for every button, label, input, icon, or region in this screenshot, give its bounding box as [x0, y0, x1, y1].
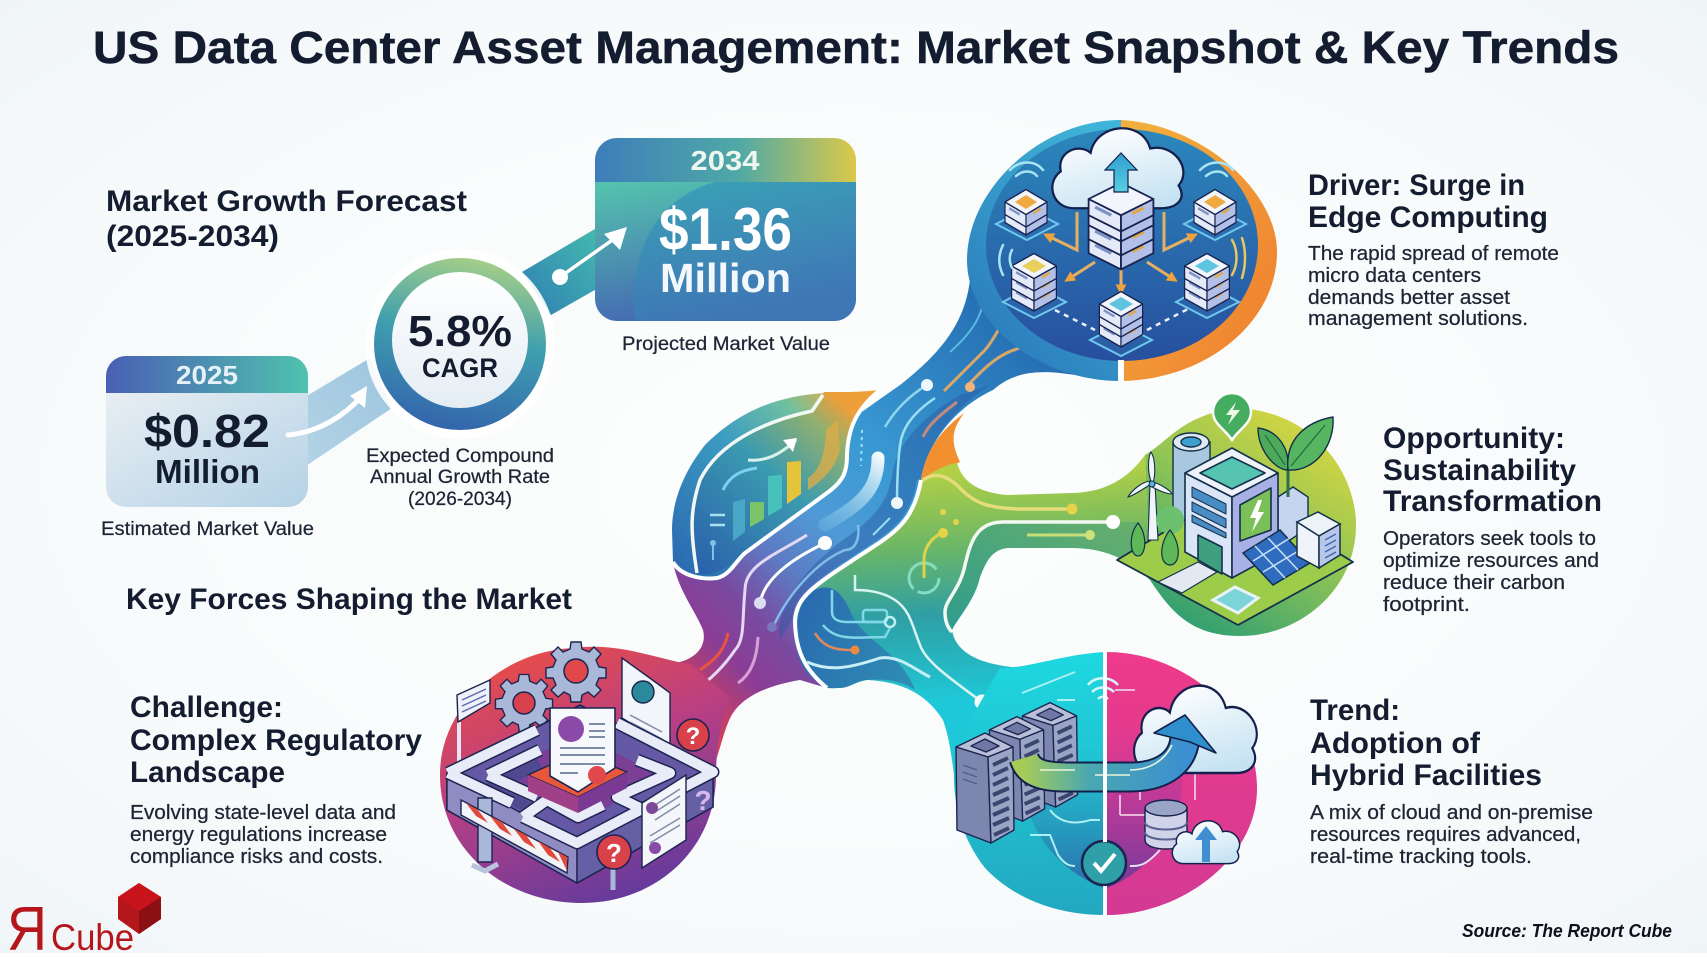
icon: site base	[1117, 490, 1353, 625]
heading: market growth forecast: (2025-2034)	[106, 220, 279, 253]
text: challenge heading: Challenge:	[130, 691, 283, 724]
icon: wifi signals	[999, 162, 1245, 278]
heading: market growth forecast: Market Growth Forecast	[106, 185, 467, 218]
card: 2034 value	[595, 138, 856, 321]
text: challenge body: energy regulations increase	[130, 824, 387, 846]
text: challenge body	[130, 802, 396, 868]
text: driver heading: Driver: Surge in	[1308, 169, 1525, 202]
icon: large gear	[546, 642, 606, 702]
icon: database	[1145, 800, 1187, 849]
text: trend body: real-time tracking tools.	[1310, 846, 1532, 868]
text: trend body	[1310, 802, 1593, 868]
card: 2025 value: Million	[155, 453, 260, 490]
card: 2025 value: $0.82	[144, 405, 270, 457]
icon: wind turbine	[1128, 452, 1172, 540]
caption: projected market value: Projected Market Value	[622, 334, 830, 355]
icon: small gear hole	[513, 692, 535, 714]
text: challenge heading: Landscape	[130, 756, 285, 789]
caption: estimated market value: Estimated Market Value	[101, 519, 314, 540]
icon: question sign bottom	[597, 835, 631, 890]
card: 2025 value: 2025	[176, 360, 238, 390]
text: trend body: resources requires advanced,	[1310, 824, 1581, 846]
text: trend body: A mix of cloud and on-premise	[1310, 802, 1593, 824]
text: challenge heading: Complex Regulatory	[130, 724, 422, 757]
panel: trend illustration	[954, 652, 1257, 916]
icon: hybrid arrow	[1024, 715, 1216, 777]
icon: question sign bottom: ?	[606, 838, 622, 868]
text: driver body	[1308, 243, 1559, 330]
caption: CAGR description: (2026-2034)	[408, 489, 512, 510]
icon: data lines	[1022, 672, 1195, 866]
icon: barrier	[461, 798, 568, 873]
icon: platforms	[996, 208, 1246, 356]
icon: maze	[447, 705, 713, 883]
text: driver body: management solutions.	[1308, 308, 1528, 330]
icon: flag	[457, 680, 490, 770]
text: driver heading	[1308, 169, 1548, 234]
CAGR ring	[365, 249, 555, 439]
flow: chart lobe	[672, 390, 880, 578]
flow: green and teal branches	[795, 455, 1150, 900]
icon: faint question mark: ?	[694, 785, 712, 816]
text: opportunity body: footprint.	[1383, 594, 1470, 616]
CAGR ring: CAGR	[422, 353, 498, 383]
icon: cloud	[1052, 128, 1183, 208]
source note: Source: The Report Cube	[1462, 921, 1672, 941]
CAGR ring: 5.8%	[408, 307, 512, 356]
flow: orange wedge	[921, 413, 964, 480]
text: challenge body: compliance risks and costs.	[130, 846, 383, 868]
text: trend heading: Hybrid Facilities	[1310, 759, 1542, 792]
bottom edge strip	[0, 953, 1707, 957]
icon: wifi	[1088, 678, 1118, 699]
card: 2034 value: Million	[660, 255, 791, 301]
flow: main river	[600, 270, 1121, 800]
title: US Data Center Asset Management: Market Snapshot & Key Trends	[93, 22, 1619, 73]
arrow band: CAGR to 2034	[522, 226, 600, 315]
text: driver body: micro data centers	[1308, 265, 1481, 287]
icon: side building	[1297, 512, 1340, 568]
icon: leaf plant	[1258, 417, 1333, 497]
icon: trees	[1131, 506, 1184, 565]
heading: market growth forecast	[106, 185, 467, 253]
text: opportunity body: reduce their carbon	[1383, 572, 1565, 594]
caption: CAGR description: Expected Compound	[366, 446, 554, 467]
icon: silo	[1173, 433, 1210, 520]
logo: RCube: Cube	[51, 917, 134, 957]
heading: key forces: Key Forces Shaping the Market	[126, 583, 572, 616]
text: opportunity heading: Opportunity:	[1383, 422, 1565, 455]
icon: energy pin	[1213, 393, 1251, 440]
text: driver heading: Edge Computing	[1308, 201, 1548, 234]
icon: certificate document	[622, 658, 670, 747]
text: opportunity heading	[1383, 422, 1602, 518]
text: opportunity heading: Transformation	[1383, 485, 1602, 518]
icon: small cloud	[1172, 821, 1240, 864]
logo: RCube	[7, 883, 161, 957]
panel: driver illustration	[967, 120, 1277, 382]
caption: CAGR description: Annual Growth Rate	[370, 467, 550, 488]
icon: main building	[1185, 448, 1278, 578]
text: challenge heading	[130, 691, 422, 789]
icon: large cloud	[1134, 686, 1257, 773]
panel: opportunity illustration	[1117, 393, 1356, 636]
panel: challenge illustration	[440, 642, 729, 903]
text: driver body: The rapid spread of remote	[1308, 243, 1559, 265]
icon: central server	[1089, 153, 1153, 269]
card: 2025 value	[106, 356, 362, 507]
text: opportunity body: Operators seek tools to	[1383, 528, 1596, 550]
icon: check badge	[1082, 841, 1126, 885]
text: trend heading: Adoption of	[1310, 727, 1481, 760]
caption: CAGR description	[366, 446, 554, 510]
icon: rear annex	[1278, 487, 1308, 540]
arrow icon on 2034 band	[552, 227, 627, 285]
icon: dashed links	[1055, 308, 1190, 330]
arrow band: 2025 to CAGR	[288, 358, 392, 470]
text: opportunity body	[1383, 528, 1599, 616]
icon: solar panel	[1243, 530, 1310, 585]
icon: profile document	[642, 775, 686, 868]
icon: edge servers	[1005, 190, 1236, 347]
icon: question sign right	[677, 719, 709, 751]
text: trend heading	[1310, 694, 1542, 792]
icon: large gear hole	[564, 659, 588, 683]
card: 2034 value: $1.36	[659, 196, 792, 263]
icon: server racks	[956, 703, 1078, 843]
icon: connectors	[1046, 212, 1195, 292]
card: 2034 value: 2034	[690, 145, 760, 176]
icon: small gear	[496, 674, 552, 732]
icon: regulation document	[550, 708, 615, 792]
text: opportunity body: optimize resources and	[1383, 550, 1599, 572]
text: challenge body: Evolving state-level data and	[130, 802, 396, 824]
icon: chip	[1213, 587, 1258, 613]
icon: question sign right: ?	[686, 723, 700, 750]
text: trend heading: Trend:	[1310, 694, 1400, 727]
text: opportunity heading: Sustainability	[1383, 454, 1576, 487]
text: driver body: demands better asset	[1308, 287, 1510, 309]
icon: walkway	[1158, 562, 1217, 593]
